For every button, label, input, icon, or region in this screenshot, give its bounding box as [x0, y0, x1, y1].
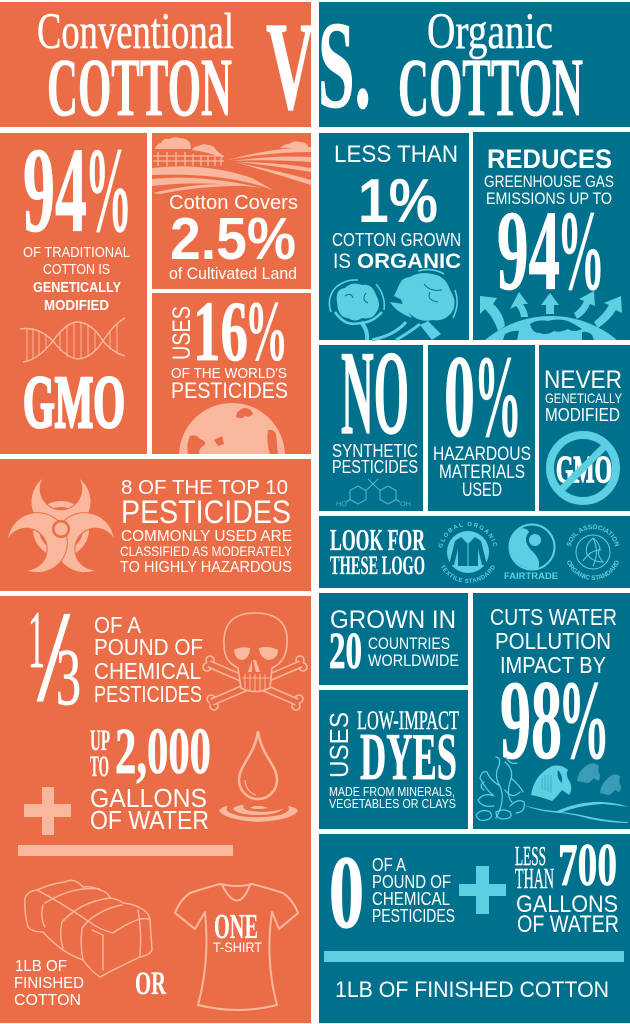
label: or: OR	[135, 966, 167, 1002]
text: uses 16% of the world's pesticides: OF THE WORLD'S	[171, 365, 287, 382]
panel: 0% hazardous materials: %	[474, 331, 522, 462]
text: uses 16% of the world's pesticides	[168, 283, 288, 403]
text: up to 2,000 gallons of water: UP	[90, 724, 110, 757]
text: of traditional cotton is genetically modified: MODIFIED	[44, 297, 109, 314]
text: of a pound of chemical pesticides: CHEMICAL	[94, 658, 201, 684]
text: less than 700 gallons of water: LESS	[515, 841, 546, 871]
logo: soil association organic standard: ORGANIC STANDARD	[567, 560, 619, 580]
panel: 94% genetically modified: %	[85, 123, 132, 258]
text: look for these logo	[330, 522, 425, 580]
stat: 94%: 94	[23, 123, 87, 258]
panel: never genetically modified	[539, 345, 630, 511]
text: 0% hazardous materials used: MATERIALS	[439, 462, 525, 483]
text: of a pound of chemical pesticides	[94, 612, 203, 707]
text: 0% hazardous materials used: 0	[444, 331, 475, 462]
text: of traditional cotton is genetically modified: COTTON IS	[43, 261, 110, 278]
heading: Conventional Cotton: COTTON	[47, 41, 232, 133]
text: of traditional cotton is genetically modified: GENETICALLY	[33, 279, 121, 296]
text: 8 of the top 10 pesticides: CLASSIFIED AS MODERATELY	[120, 543, 293, 559]
icon: waves	[523, 802, 628, 823]
text: reduces greenhouse gas emissions up to 94%	[484, 144, 614, 314]
text: uses 16% of the world's pesticides: PESTICIDES	[171, 378, 288, 403]
icon: biohazard	[1, 477, 121, 581]
panel: low-impact dyes	[319, 690, 468, 829]
panel: reduces greenhouse gas	[473, 132, 630, 340]
text: uses low-impact dyes: DYES	[360, 720, 457, 794]
text: 1lb of finished cotton	[14, 958, 84, 1009]
panel: grown in 20 countries	[319, 593, 468, 685]
text: cuts water pollution impact by 98%: POLLUTION	[495, 628, 611, 654]
icon: cotton bale	[25, 880, 152, 977]
stat: one third: 3	[56, 634, 81, 722]
icon: coral	[476, 757, 524, 820]
panel: no synthetic pesticides	[319, 326, 423, 511]
text: one t-shirt: ONE	[214, 907, 258, 946]
text: uses low-impact dyes: MADE FROM MINERALS,	[329, 785, 455, 799]
text: cotton covers 2.5% of cultivated land: of Cultivated Land	[169, 264, 297, 283]
text: no synthetic pesticides	[332, 326, 418, 477]
text: reduces greenhouse gas emissions up to 94%: REDUCES	[487, 144, 612, 174]
heading: Conventional Cotton	[37, 4, 234, 133]
text: cotton covers 2.5% of cultivated land: 2.5%	[170, 206, 296, 272]
text: one t-shirt	[213, 907, 262, 955]
text: 1lb of finished cotton: 1LB OF FINISHED COTTON	[335, 977, 609, 1002]
text: less than 700 gallons of water: THAN	[515, 863, 554, 895]
text: up to 2,000 gallons of water	[90, 715, 211, 835]
logo: soil association organic standard	[566, 524, 620, 580]
text: up to 2,000 gallons of water: GALLONS	[90, 783, 207, 813]
text: uses low-impact dyes: LOW-IMPACT	[357, 706, 459, 735]
text: look for these logo: THESE LOGO	[330, 551, 425, 580]
icon: molecule: HO	[336, 502, 347, 508]
logo: fairtrade: FAIRTRADE	[504, 571, 558, 581]
logo: soil association organic standard: SOIL ASSOCIATION	[566, 524, 620, 546]
text: 8 of the top 10 pesticides: 8 OF THE TOP 10	[121, 477, 288, 499]
text: less than 700 gallons of water: GALLONS	[516, 891, 618, 918]
text: reduces greenhouse gas emissions up to 94%: 94	[497, 187, 560, 314]
text: grown in 20 countries worldwide: COUNTRIES	[368, 634, 450, 653]
text: uses low-impact dyes: VEGETABLES OR CLAYS	[329, 797, 456, 811]
heading: Organic Cotton	[398, 4, 583, 133]
icon: t-shirt	[175, 884, 298, 1010]
panel: 0% hazardous materials	[428, 331, 535, 511]
text: 0% hazardous materials used: HAZARDOUS	[433, 444, 531, 465]
divider bar	[324, 951, 624, 962]
text: up to 2,000 gallons of water: OF WATER	[90, 805, 209, 835]
stat: one third: 1	[28, 594, 45, 685]
text: cotton covers 2.5% of cultivated land	[169, 192, 298, 283]
text: grown in 20 countries worldwide: WORLDWIDE	[368, 651, 459, 670]
text: of traditional cotton is genetically modified	[23, 244, 130, 314]
icon: farm landscape	[152, 137, 311, 194]
text: 0% hazardous materials used	[433, 331, 531, 501]
divider bar	[18, 845, 233, 856]
heading: VS.: S.	[318, 0, 371, 135]
panel: biohazard pesticides	[0, 459, 311, 591]
heading: VS.: V	[266, 0, 315, 136]
icon: DNA helix	[20, 318, 125, 362]
text: less than 1% cotton grown is organic: ORGANIC	[357, 250, 461, 273]
icon: skull and crossbones	[203, 613, 307, 710]
text: less than 1% cotton grown is organic	[332, 141, 461, 273]
text: of a pound of chemical pesticides: POUND OF	[94, 634, 203, 660]
text: of a pound of chemical pesticides: PESTICIDES	[94, 681, 202, 707]
panel: look for these logos	[319, 516, 630, 588]
text: of a pound of chemical pesticides	[372, 855, 455, 926]
text: less than 1% cotton grown is organic: COTTON GROWN	[332, 230, 461, 250]
text: up to 2,000 gallons of water: 2,000	[115, 715, 211, 788]
text: 1lb of finished cotton: FINISHED	[14, 975, 84, 992]
icon: cotton bolls	[329, 270, 457, 340]
text: 8 of the top 10 pesticides	[120, 477, 293, 576]
text: grown in 20 countries worldwide: 20	[329, 623, 362, 680]
logo: global organic textile standard	[438, 522, 498, 583]
text: uses 16% of the world's pesticides: %	[245, 283, 288, 379]
text: 8 of the top 10 pesticides: PESTICIDES	[121, 494, 291, 530]
text: 1lb of finished cotton: 1LB OF	[15, 958, 67, 975]
text: never genetically modified	[544, 366, 623, 425]
panel: organic cotton footprint	[319, 832, 630, 1023]
text: uses low-impact dyes	[324, 706, 459, 811]
panel: 94% genetically modified	[0, 123, 147, 454]
text: of traditional cotton is genetically modified: OF TRADITIONAL	[23, 244, 130, 261]
logo: fairtrade	[504, 524, 558, 581]
icon: earth	[485, 316, 617, 340]
text: of a pound of chemical pesticides: POUND OF	[372, 872, 451, 892]
text: up to 2,000 gallons of water: TO	[90, 750, 109, 783]
panel: cuts water pollution	[473, 593, 630, 829]
text: of a pound of chemical pesticides: OF A	[94, 612, 142, 638]
panel: less than 1% organic	[319, 133, 469, 340]
text: cuts water pollution impact by 98%	[490, 604, 617, 783]
text: no synthetic pesticides: SYNTHETIC	[332, 441, 418, 461]
text: cuts water pollution impact by 98%: IMPACT BY	[500, 652, 606, 678]
text: less than 700 gallons of water	[515, 832, 619, 938]
text: grown in 20 countries worldwide	[329, 606, 459, 680]
text: 8 of the top 10 pesticides: TO HIGHLY HAZARDOUS	[120, 559, 292, 576]
text: less than 1% cotton grown is organic: LESS THAN	[334, 141, 458, 168]
icon: molecule	[336, 479, 411, 508]
panel: cotton covers 2.5%	[152, 133, 311, 289]
text: grown in 20 countries worldwide: GROWN IN	[330, 606, 456, 634]
stat: zero: 0	[329, 835, 364, 950]
panel: organic cotton header	[319, 2, 630, 133]
text: never genetically modified: NEVER	[544, 366, 622, 394]
text: uses 16% of the world's pesticides: USES	[168, 306, 196, 360]
text: less than 1% cotton grown is organic: 1%	[358, 167, 438, 236]
icon: globe	[179, 403, 285, 454]
icon: water drop	[219, 731, 298, 822]
text: look for these logo: LOOK FOR	[330, 522, 425, 557]
text: uses low-impact dyes: USES	[324, 712, 354, 778]
label: GMO: GMO	[23, 362, 125, 444]
icon: no GMO sign	[550, 435, 616, 501]
infographic: conventional vs organic cotton: NO	[341, 326, 409, 459]
text: less than 1% cotton grown is organic: IS	[333, 250, 351, 273]
text: 1lb of finished cotton: COTTON	[14, 992, 81, 1009]
text: cuts water pollution impact by 98%: 98	[500, 658, 562, 783]
text: of a pound of chemical pesticides: OF A	[372, 855, 406, 875]
icon: plus sign	[24, 787, 71, 835]
panel: conventional cotton footprint	[0, 585, 311, 1023]
text: one t-shirt: T-SHIRT	[213, 939, 262, 955]
panel: uses 16% of pesticides	[152, 293, 311, 454]
logo: global organic textile standard: TEXTILE STANDARD	[441, 564, 494, 583]
text: cotton covers 2.5% of cultivated land: Cotton Covers	[169, 192, 298, 214]
text: 8 of the top 10 pesticides: COMMONLY USED ARE	[121, 528, 292, 545]
stat: one third	[28, 585, 81, 729]
icon: rising arrows	[480, 291, 622, 331]
text: 0% hazardous materials used: USED	[462, 480, 502, 501]
heading: Organic Cotton: Organic	[427, 4, 553, 60]
stat: one third: /	[37, 585, 71, 729]
text: uses 16% of the world's pesticides: 16	[193, 283, 248, 379]
text: of a pound of chemical pesticides: CHEMICAL	[372, 889, 450, 909]
icon: molecule: OH	[400, 502, 411, 508]
icon: fish	[531, 763, 621, 801]
text: no synthetic pesticides: PESTICIDES	[332, 457, 418, 477]
logo: global organic textile standard: GLOBAL ORGANIC	[438, 522, 498, 548]
icon: plus sign	[459, 866, 506, 914]
heading: Conventional Cotton: Conventional	[37, 4, 234, 60]
text: of a pound of chemical pesticides: PESTICIDES	[372, 906, 455, 926]
panel: conventional cotton header	[0, 2, 311, 133]
